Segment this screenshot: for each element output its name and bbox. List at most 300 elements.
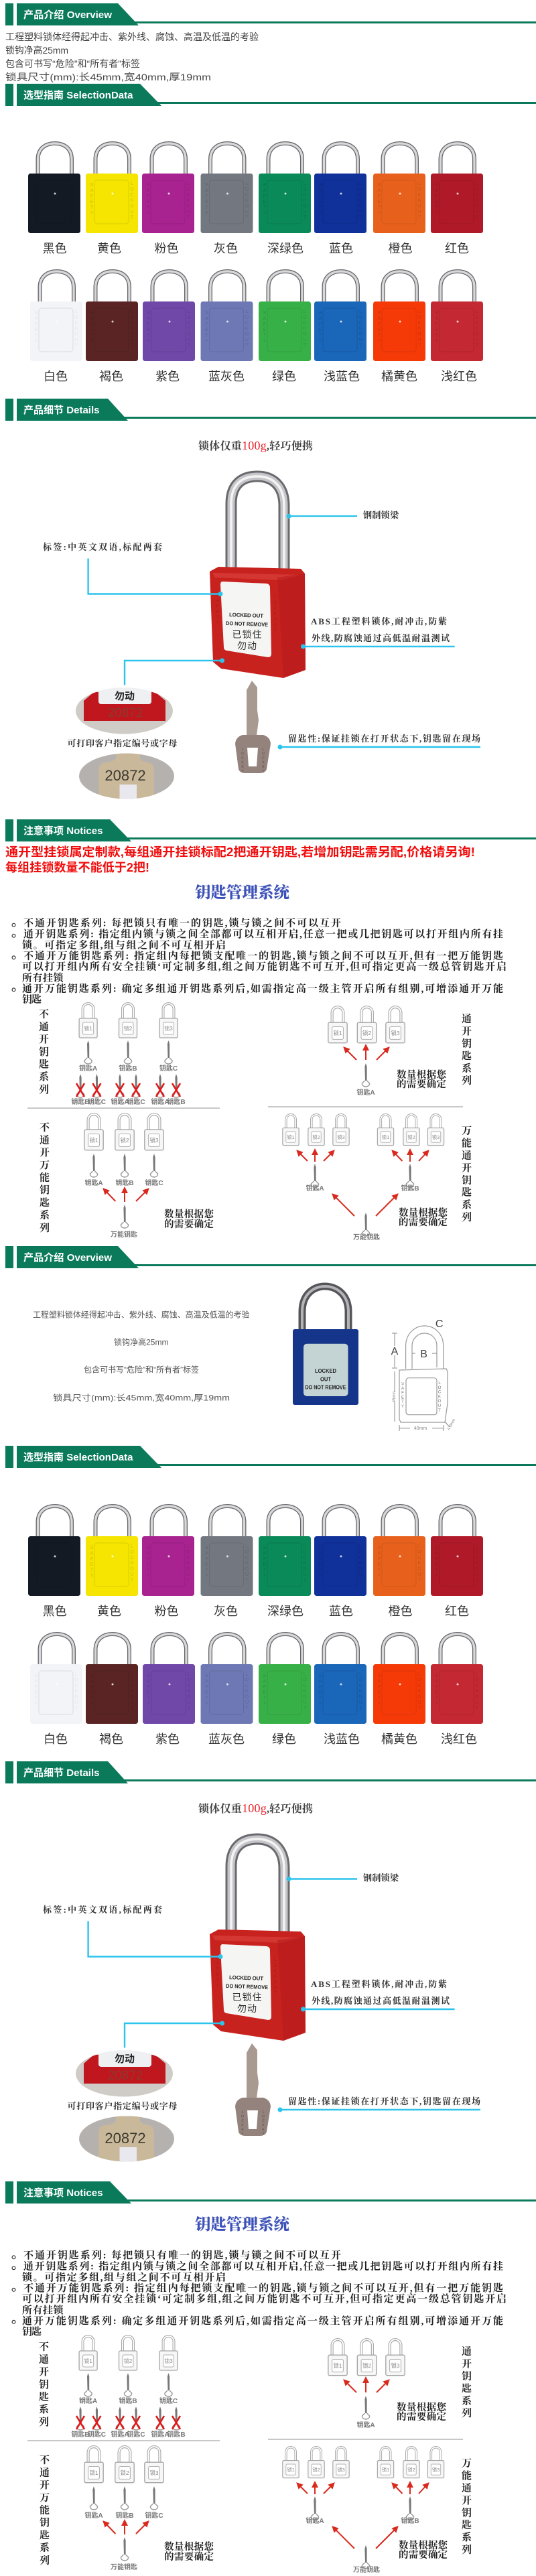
callout: label [43, 1905, 222, 1959]
diagram: non-common key series (second): 锁1 [84, 2358, 92, 2364]
key system bullet list (second): 可以打开组内所有安全挂锁‘可定制多组,组之间万能钥匙不可互开,但可指定更高一级总管钥匙开启 [22, 2293, 507, 2305]
large red padlock: LOCKOUT [273, 595, 277, 634]
swatch: tangerine [373, 1634, 425, 1746]
swatch: blue: SAFETY [318, 183, 323, 216]
key system bullet list: 不通开万能钥匙系列: 指定组内每把锁支配唯一的钥匙,锁与锁之间不可以互开,但有一把万能钥匙 [23, 950, 503, 962]
swatch: brown: 褐色 [99, 1733, 123, 1746]
dimension drawing: C [436, 1318, 443, 1330]
dimension drawing: B [420, 1349, 427, 1360]
diagram: common key series (second): 通开钥匙系列 [460, 2346, 472, 2420]
key system bullet list [12, 917, 507, 1005]
diagram: common key series: 通开钥匙系列 [460, 1013, 472, 1087]
diagram: non-common key series: 钥匙B [119, 1064, 137, 1073]
red notice text: 每组挂锁数量不能低于2把! [5, 861, 149, 874]
diagram: non-common master key series [38, 1114, 214, 1239]
swatch: pink: LOCKOUT [186, 182, 190, 221]
swatch: purple: LOCKOUT [186, 310, 192, 349]
diagram: non-common master key series (second): 钥匙B [115, 2511, 134, 2520]
overview text block: 锁钩净高25mm [5, 45, 68, 56]
diagram: common master key series: 锁2 [312, 1134, 320, 1140]
swatch: purple: LOCKOUT [186, 1672, 192, 1712]
diagram: non-common master key series: 锁1 [89, 1137, 98, 1144]
print caption: 可打印客户指定编号或字母 [67, 738, 177, 748]
diagram: non-common key series: 锁2 [124, 1025, 133, 1032]
swatch: light blue [314, 271, 366, 383]
diagram: non-common key series (second): 钥匙C [88, 2430, 106, 2439]
swatch: light blue: LOCKOUT [358, 1672, 363, 1712]
weight caption: 锁体仅重100g,轻巧便携 [198, 1802, 313, 1815]
diagram: common key series (second): 锁3 [391, 2362, 400, 2369]
key system bullet list: 所有挂锁 [22, 971, 64, 984]
swatch: black: SAFETY [32, 1546, 36, 1579]
diagram: non-common master key series (second) [38, 2447, 214, 2571]
overview text block (centred): 工程塑料锁体经得起冲击、紫外线、腐蚀、高温及低温的考验 [33, 1309, 249, 1320]
swatch: green: LOCKOUT [302, 1672, 307, 1712]
colour selection grid [28, 143, 483, 383]
swatch: blue: SAFETY [318, 1546, 323, 1579]
swatch: dark green: 深绿色 [267, 1605, 304, 1618]
swatch: yellow: 黄色 [97, 242, 121, 255]
swatch: red [431, 143, 483, 255]
large red padlock: LOCKOUT [273, 1958, 277, 1997]
swatch: light blue: LOCKOUT [358, 310, 363, 349]
swatch: white: 白色 [44, 370, 68, 383]
swatch: blue grey: SAFETY [204, 311, 209, 344]
diagram: common master key series: 锁1 [287, 1134, 295, 1140]
swatch: dark green [259, 143, 311, 255]
diagram: common master key series (second): 锁1 [287, 2467, 295, 2473]
overview text block (centred): 锁具尺寸(mm):长45mm,宽40mm,厚19mm [53, 1392, 230, 1403]
swatch: yellow: LOCKOUT [129, 182, 134, 221]
callout: label: 标签:中英文双语,标配两套 [43, 1905, 162, 1915]
key system bullet list: 不通开钥匙系列: 每把锁只有唯一的钥匙,锁与锁之间不可以互开 [23, 917, 341, 929]
swatch: tangerine: SAFETY [377, 311, 382, 344]
heading: SelectionData (second): 选型指南 SelectionData [23, 1451, 133, 1463]
diagram: non-common master key series (second): 数量根据您 [164, 2540, 214, 2553]
heading: SelectionData (second) [5, 1446, 536, 1468]
swatch: tangerine: LOCKOUT [417, 310, 422, 349]
diagram: common key series (second): 锁1 [333, 2362, 342, 2369]
swatch: grey: 灰色 [214, 242, 238, 255]
swatch: yellow: SAFETY [90, 183, 94, 216]
swatch: pink: SAFETY [146, 1546, 150, 1579]
swatch: blue: LOCKOUT [358, 1544, 363, 1584]
swatch: green: 绿色 [272, 370, 296, 383]
swatch: pink: 粉色 [154, 242, 178, 255]
diagram: non-common key series (second): 钥匙B [119, 2396, 137, 2405]
photo: printed number on key: 20872 [105, 2130, 146, 2147]
callout: ABS body: 外线,防腐蚀通过高低温耐温测试 [312, 1996, 450, 2006]
diagram: common master key series: 万能通开钥匙系列 [460, 1126, 472, 1224]
heading: Notices: 注意事项 Notices [23, 825, 103, 837]
diagram: common master key series [283, 1115, 472, 1241]
overview text block (centred): 包含可书写“危险”和“所有者”标签 [84, 1364, 199, 1375]
diagram: non-common key series (second): 锁3 [164, 2358, 173, 2364]
diagram: non-common key series: 钥匙C [88, 1097, 106, 1106]
diagram: common master key series (second): 万能通开钥匙系列 [460, 2457, 472, 2557]
diagram: non-common key series: 钥匙C [127, 1097, 145, 1106]
swatch: light red: LOCKOUT [474, 310, 480, 349]
key system bullet list (second): 不通开万能钥匙系列: 指定组内每把锁支配唯一的钥匙,锁与锁之间不可以互开,但有一把万能钥匙 [23, 2282, 503, 2294]
diagram: non-common master key series: 不通开万能钥匙系列 [38, 1122, 50, 1235]
diagram: common master key series (second): 钥匙A [306, 2516, 324, 2525]
diagram: non-common key series (second): 不通开钥匙系列 [38, 2341, 48, 2429]
key system bullet list: 通开钥匙系列: 指定组内锁与锁之间全部都可以互相开启,任意一把或几把钥匙可以打开组内所有挂 [23, 928, 503, 940]
swatch: red: SAFETY [434, 183, 440, 216]
swatch: blue grey: LOCKOUT [245, 310, 249, 349]
swatch: black [28, 1506, 80, 1618]
swatch: black: SAFETY [32, 183, 36, 216]
diagram: non-common key series: 钥匙A [79, 1064, 97, 1073]
diagram: non-common master key series: 锁2 [120, 1137, 129, 1144]
swatch: dark green: SAFETY [263, 1546, 267, 1579]
diagram: common master key series (second): 钥匙B [401, 2516, 419, 2525]
swatch: red: SAFETY [434, 1546, 440, 1579]
callout: steel shackle: 钢制锁梁 [363, 511, 400, 520]
diagram: non-common key series: 锁1 [84, 1025, 92, 1032]
overview text block: 锁具尺寸(mm):长45mm,宽40mm,厚19mm [5, 72, 211, 82]
diagram: non-common master key series (second): 锁3 [149, 2469, 159, 2476]
swatch: green: 绿色 [272, 1733, 296, 1746]
swatch: grey: LOCKOUT [245, 1544, 249, 1584]
swatch: blue: 蓝色 [329, 242, 353, 255]
weight caption: 锁体仅重100g,轻巧便携 [198, 439, 313, 452]
key system bullet list (second): 钥匙 [22, 2325, 42, 2337]
swatch: brown [86, 271, 138, 383]
diagram: common key series [328, 1007, 472, 1097]
swatch: white: 白色 [44, 1733, 68, 1746]
swatch: orange [373, 1506, 425, 1618]
key system bullet list: 通开万能钥匙系列: 确定多组通开钥匙系列后,如需指定高一级主管开启所有组别,可增添通开万能 [22, 982, 503, 994]
diagram: non-common master key series (second): 钥匙C [145, 2511, 163, 2520]
swatch: brown: LOCKOUT [129, 310, 134, 349]
swatch: blue grey: 蓝灰色 [208, 370, 245, 383]
swatch: orange: SAFETY [377, 183, 382, 216]
swatch: pink: 粉色 [154, 1605, 178, 1618]
swatch: black: LOCKOUT [72, 182, 76, 221]
callout: key retaining: 留匙性:保证挂锁在打开状态下,钥匙留在现场 [288, 2096, 480, 2106]
swatch: blue: LOCKOUT [358, 182, 363, 221]
dimension drawing: 45mm [393, 1392, 397, 1402]
swatch: pink: LOCKOUT [186, 1544, 190, 1584]
swatch: light red: 浅红色 [441, 1733, 477, 1746]
red notice text [5, 845, 475, 874]
panel: product details [43, 439, 480, 801]
swatch: red: LOCKOUT [474, 1544, 480, 1584]
diagram: common master key series (second): 锁3 [432, 2467, 440, 2473]
diagram: common key series (second): 钥匙A [356, 2421, 375, 2429]
overview text block [5, 31, 259, 82]
diagram: non-common key series (second) [38, 2336, 186, 2439]
diagram: common master key series: 锁1 [382, 1134, 389, 1140]
diagram: non-common key series: 钥匙A [111, 1097, 129, 1106]
diagram: non-common key series: 钥匙A [151, 1097, 170, 1106]
swatch: blue grey: SAFETY [204, 1674, 209, 1707]
swatch: black: 黑色 [43, 1605, 67, 1618]
large red padlock: 勿动 [237, 2003, 257, 2014]
large red padlock: LOCKED OUT [229, 612, 263, 619]
callout: key retaining [277, 2096, 480, 2112]
diagram: common key series: 数量根据您 [397, 1069, 448, 1081]
swatch: light blue: SAFETY [318, 311, 323, 344]
heading: Notices [5, 819, 536, 841]
diagram: common key series: 锁2 [362, 1030, 371, 1036]
swatch: purple [143, 271, 195, 383]
callout: key retaining: 留匙性:保证挂锁在打开状态下,钥匙留在现场 [288, 734, 480, 744]
callout: key retaining [277, 734, 480, 749]
photo: blue padlock [293, 1286, 358, 1405]
large red padlock: 勿动 [237, 640, 257, 651]
heading: SelectionData: 选型指南 SelectionData [23, 89, 133, 101]
heading: Overview [5, 3, 536, 25]
swatch: white: SAFETY [34, 1674, 39, 1707]
diagram: common master key series (second): 锁3 [337, 2467, 345, 2473]
callout: ABS body: ABS工程塑料锁体,耐冲击,防紫 [311, 1979, 447, 1989]
swatch: white: SAFETY [34, 311, 39, 344]
overview text block: 工程塑料锁体经得起冲击、紫外线、腐蚀、高温及低温的考验 [5, 31, 259, 42]
swatch: brown: SAFETY [90, 311, 94, 344]
large red padlock: 已锁住 [232, 629, 263, 640]
swatch: blue [314, 1506, 366, 1618]
swatch: grey: SAFETY [204, 183, 209, 216]
swatch: light blue: 浅蓝色 [324, 1733, 360, 1746]
swatch: yellow: LOCKOUT [129, 1544, 134, 1584]
swatch: blue grey: 蓝灰色 [208, 1733, 245, 1746]
swatch: light blue: 浅蓝色 [324, 370, 360, 383]
large red padlock [210, 1839, 306, 2041]
diagram: non-common key series: 钥匙B [71, 1097, 90, 1106]
photo: blue padlock: DO NOT REMOVE [306, 1384, 346, 1391]
diagram: common master key series (second): 锁1 [382, 2467, 389, 2473]
key: LOCKEY [241, 2110, 245, 2137]
callout: steel shackle [287, 1873, 400, 1883]
diagram: common master key series: 锁3 [432, 1134, 440, 1140]
heading: Details (second) [5, 1761, 536, 1783]
key [235, 2043, 271, 2137]
swatch: green: SAFETY [263, 1674, 267, 1707]
diagram: common master key series: 锁3 [337, 1134, 345, 1140]
dimension drawing [391, 1318, 456, 1431]
swatch: red: 红色 [445, 242, 469, 255]
callout: label: 标签:中英文双语,标配两套 [43, 542, 162, 552]
large red padlock: LOCKED OUT [229, 1974, 263, 1982]
swatch: red: 红色 [445, 1605, 469, 1618]
diagram: common master key series: 的需要确定 [399, 1216, 448, 1228]
swatch: blue grey [201, 1634, 253, 1746]
diagram: non-common key series (second): 钥匙A [79, 2396, 97, 2405]
large red padlock: DO NOT REMOVE [226, 620, 269, 628]
diagram: non-common key series (second): 锁2 [124, 2358, 133, 2364]
panel: product details (second) [43, 1802, 480, 2163]
callout: number print [125, 658, 224, 685]
heading: Overview (second) [5, 1246, 536, 1268]
diagram: non-common key series (second): 钥匙C [127, 2430, 145, 2439]
key system bullet list (second) [12, 2249, 507, 2337]
diagram: common master key series (second) [283, 2447, 472, 2574]
swatch: light red [431, 1634, 483, 1746]
key system bullet list: 钥匙 [22, 993, 42, 1005]
swatch: yellow [86, 143, 138, 255]
swatch: pink: SAFETY [146, 183, 150, 216]
overview text block (centred): 锁钩净高25mm [114, 1337, 169, 1347]
swatch: purple: 紫色 [155, 370, 180, 383]
swatch: dark green [259, 1506, 311, 1618]
swatch: dark green: LOCKOUT [302, 182, 307, 221]
callout: number print [125, 2021, 224, 2047]
swatch: pink [142, 143, 194, 255]
key system bullet list (second): 通开万能钥匙系列: 确定多组通开钥匙系列后,如需指定高一级主管开启所有组别,可增添通开万能 [22, 2315, 503, 2327]
swatch: white [30, 1634, 82, 1746]
swatch: orange [373, 143, 425, 255]
swatch: grey: LOCKOUT [245, 182, 249, 221]
swatch: orange: LOCKOUT [417, 1544, 422, 1584]
diagram: common key series: 锁3 [391, 1030, 400, 1036]
swatch: black [28, 143, 80, 255]
diagram: common master key series (second): 锁2 [312, 2467, 320, 2473]
print caption: 可打印客户指定编号或字母 [67, 2101, 177, 2111]
swatch: orange: 橙色 [389, 242, 413, 255]
swatch: blue grey [201, 271, 253, 383]
dimension drawing: 40mm [414, 1426, 427, 1431]
swatch: blue [314, 143, 366, 255]
diagram: common master key series (second): 数量根据您 [399, 2539, 449, 2551]
swatch: light red: LOCKOUT [474, 1672, 480, 1712]
diagram: non-common key series: 锁3 [164, 1025, 173, 1032]
swatch: tangerine: 橘黄色 [381, 370, 417, 383]
swatch: green [259, 271, 311, 383]
heading: Details (second): 产品细节 Details [23, 1767, 99, 1779]
swatch: brown: 褐色 [99, 370, 123, 383]
diagram: non-common master key series (second): 不通开万能钥匙系列 [38, 2455, 50, 2567]
diagram: common master key series: 万能钥匙 [353, 1233, 380, 1241]
diagram: common master key series (second): 万能钥匙 [353, 2565, 380, 2574]
diagram: non-common master key series: 钥匙A [84, 1178, 103, 1187]
swatch: tangerine [373, 271, 425, 383]
swatch: dark green: 深绿色 [267, 242, 304, 255]
diagram: non-common master key series: 的需要确定 [164, 1218, 214, 1230]
swatch: dark green: LOCKOUT [302, 1544, 307, 1584]
swatch: tangerine: SAFETY [377, 1674, 382, 1707]
swatch: light red: SAFETY [434, 311, 440, 344]
swatch: red [431, 1506, 483, 1618]
swatch: green [259, 1634, 311, 1746]
diagram: non-common master key series (second): 锁2 [120, 2469, 129, 2476]
swatch: light red [431, 271, 483, 383]
diagram: non-common key series (second): 钥匙B [71, 2430, 90, 2439]
title: key management system (second): 钥匙管理系统 [195, 2215, 291, 2234]
key [235, 681, 271, 774]
swatch: orange: 橙色 [389, 1605, 413, 1618]
swatch: purple: SAFETY [146, 1674, 151, 1707]
large red padlock: SAFETY [216, 593, 220, 626]
dimension drawing: LOCKOUT [438, 1381, 442, 1414]
key system bullet list: 可以打开组内所有安全挂锁‘可定制多组,组之间万能钥匙不可互开,但可指定更高一级总管钥匙开启 [22, 961, 507, 973]
swatch: light red: SAFETY [434, 1674, 440, 1707]
swatch: grey: SAFETY [204, 1546, 209, 1579]
diagram: common key series (second): 锁2 [362, 2362, 371, 2369]
swatch: dark green: SAFETY [263, 183, 267, 216]
callout: label [43, 542, 222, 596]
overview text block: 包含可书写“危险”和“所有者”标签 [5, 58, 140, 69]
callout: ABS body [301, 1979, 455, 2011]
swatch: green: SAFETY [263, 311, 267, 344]
diagram: common master key series (second): 的需要确定 [399, 2549, 448, 2561]
heading: SelectionData [5, 84, 536, 106]
diagram: non-common key series [38, 1004, 186, 1106]
swatch: blue grey: LOCKOUT [245, 1672, 249, 1712]
swatch: purple [143, 1634, 195, 1746]
photo: printed number on key [79, 753, 175, 801]
callout: steel shackle [287, 511, 400, 520]
key system bullet list (second): 通开钥匙系列: 指定组内锁与锁之间全部都可以互相开启,任意一把或几把钥匙可以打开组内所有挂 [23, 2260, 503, 2273]
swatch: brown: LOCKOUT [129, 1672, 134, 1712]
diagram: non-common master key series (second): 锁1 [89, 2469, 98, 2476]
diagram: non-common master key series: 万能钥匙 [111, 1230, 137, 1239]
heading: Details [5, 399, 536, 421]
diagram: non-common key series: 钥匙B [167, 1097, 186, 1106]
swatch: white: LOCKOUT [74, 310, 79, 349]
swatch: light red: 浅红色 [441, 370, 477, 383]
heading: Details: 产品细节 Details [23, 404, 99, 416]
diagram: non-common master key series (second): 的需要确定 [164, 2551, 214, 2563]
diagram: non-common master key series: 数量根据您 [164, 1208, 214, 1220]
photo: blue padlock: LOCKED [315, 1367, 336, 1374]
key: LOCKEY [261, 748, 265, 774]
large red padlock: SAFETY [216, 1956, 220, 1989]
swatch: brown [86, 1634, 138, 1746]
diagram: common master key series: 锁2 [407, 1134, 415, 1140]
swatch: light blue: SAFETY [318, 1674, 323, 1707]
heading: Overview: 产品介绍 Overview [23, 9, 112, 21]
title: key management system: 钥匙管理系统 [195, 883, 291, 902]
diagram: common master key series: 钥匙B [401, 1184, 419, 1193]
swatch: yellow: 黄色 [97, 1605, 121, 1618]
swatch: light blue [314, 1634, 366, 1746]
heading: Notices (second): 注意事项 Notices [23, 2187, 103, 2199]
diagram: non-common key series (second): 钥匙C [159, 2396, 178, 2405]
diagram: common key series (second): 的需要确定 [397, 2411, 446, 2423]
key system bullet list (second): 锁。可指定多组,组与组之间不可互相开启 [22, 2271, 226, 2283]
diagram: common master key series (second): 锁2 [407, 2467, 415, 2473]
swatch: green: LOCKOUT [302, 310, 307, 349]
swatch: tangerine: LOCKOUT [417, 1672, 422, 1712]
diagram: common master key series: 数量根据您 [399, 1207, 449, 1219]
diagram: non-common master key series (second): 钥匙A [84, 2511, 103, 2520]
photo: printed number on key: 20872 [105, 767, 146, 784]
key system bullet list (second): 所有挂锁 [22, 2304, 64, 2316]
swatch: orange: SAFETY [377, 1546, 382, 1579]
large red padlock: 已锁住 [232, 1992, 263, 2003]
key system bullet list: 锁。可指定多组,组与组之间不可互相开启 [22, 939, 226, 951]
swatch: black: 黑色 [43, 242, 67, 255]
red notice text: 通开型挂锁属定制款,每组通开挂锁标配2把通开钥匙,若增加钥匙需另配,价格请另询! [5, 845, 475, 859]
diagram: common master key series: 钥匙A [306, 1184, 324, 1193]
swatch: black: LOCKOUT [72, 1544, 76, 1584]
dimension drawing: A [391, 1346, 399, 1357]
photo: printed number on lock: 勿动 [115, 2053, 135, 2065]
photo: printed number on lock: 20872 [108, 2069, 143, 2083]
overview text block (centred) [33, 1309, 249, 1403]
swatch: orange: LOCKOUT [417, 182, 422, 221]
colour selection grid (second) [28, 1506, 483, 1746]
swatch: purple: 紫色 [155, 1733, 180, 1746]
diagram: common key series (second): 数量根据您 [397, 2401, 448, 2413]
photo: printed number on lock: 20872 [108, 706, 143, 720]
swatch: grey: 灰色 [214, 1605, 238, 1618]
photo: blue padlock: OUT [320, 1376, 332, 1383]
diagram: common key series: 钥匙A [356, 1088, 375, 1097]
diagram: non-common master key series (second): 万能钥匙 [111, 2563, 137, 2571]
